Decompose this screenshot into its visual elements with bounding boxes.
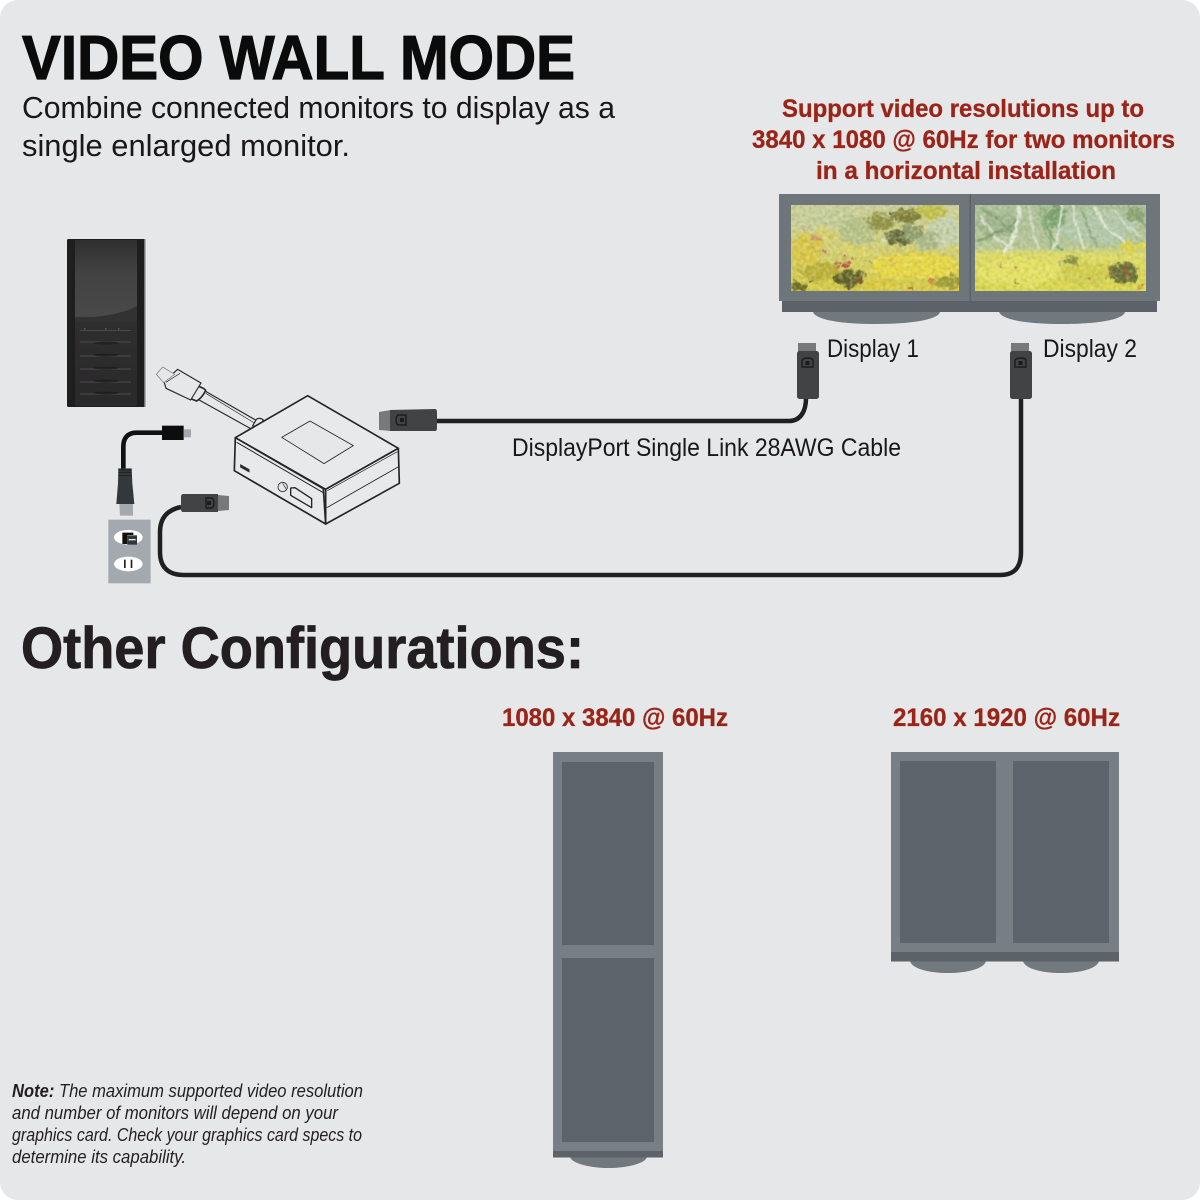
vertical stacked monitors [553, 752, 663, 1168]
cable to display 2 [160, 398, 1021, 575]
cable to display 1 [436, 398, 806, 421]
screen 1 landscape [790, 205, 961, 291]
connector: display 2 [1010, 343, 1032, 399]
connector: display 1 [797, 343, 819, 399]
monitor frame [779, 194, 1160, 301]
note: determine its capability. [12, 1147, 186, 1167]
monitor stands [813, 312, 1125, 324]
label: vertical resolution: 1080 x 3840 @ 60Hz [502, 704, 728, 732]
connector: hub output cable end [379, 409, 437, 431]
subtitle: single enlarged monitor. [22, 128, 350, 163]
label: Display 2: Display 2 [1043, 335, 1137, 363]
label: cable: DisplayPort Single Link 28AWG Cable [512, 434, 901, 462]
pc tower [67, 239, 146, 407]
resolution callout: in a horizontal installation [816, 157, 1116, 185]
label: Display 1: Display 1 [827, 335, 919, 363]
side by side portrait monitors [891, 752, 1119, 973]
screen 2 landscape [975, 205, 1146, 291]
micro usb plug [162, 426, 191, 440]
note: graphics card. Check your graphics card specs to [12, 1125, 362, 1145]
connector: hub second cable end [181, 494, 229, 512]
note: and number of monitors will depend on your [12, 1103, 339, 1123]
wall outlet [108, 520, 151, 583]
heading: other configurations: Other Configurations: [21, 616, 584, 681]
subtitle: Combine connected monitors to display as a [22, 90, 616, 125]
mini displayport adapter cable [156, 367, 263, 429]
resolution callout: Support video resolutions up to [782, 95, 1144, 123]
usb power cable [123, 433, 163, 471]
resolution callout: 3840 x 1080 @ 60Hz for two monitors [752, 126, 1175, 154]
hub body [234, 396, 399, 524]
note: Note: The maximum supported video resolution [12, 1081, 363, 1101]
usb-a plug [116, 468, 134, 516]
left diagram group, in zoomed coordinates [108, 367, 399, 583]
note [12, 1081, 363, 1167]
resolution callout [752, 95, 1175, 185]
title: VIDEO WALL MODE [22, 24, 575, 93]
dual monitors horizontal [779, 194, 1160, 324]
subtitle [22, 90, 616, 163]
label: 2x1 resolution: 2160 x 1920 @ 60Hz [893, 704, 1120, 732]
monitor base bar [782, 301, 1157, 312]
